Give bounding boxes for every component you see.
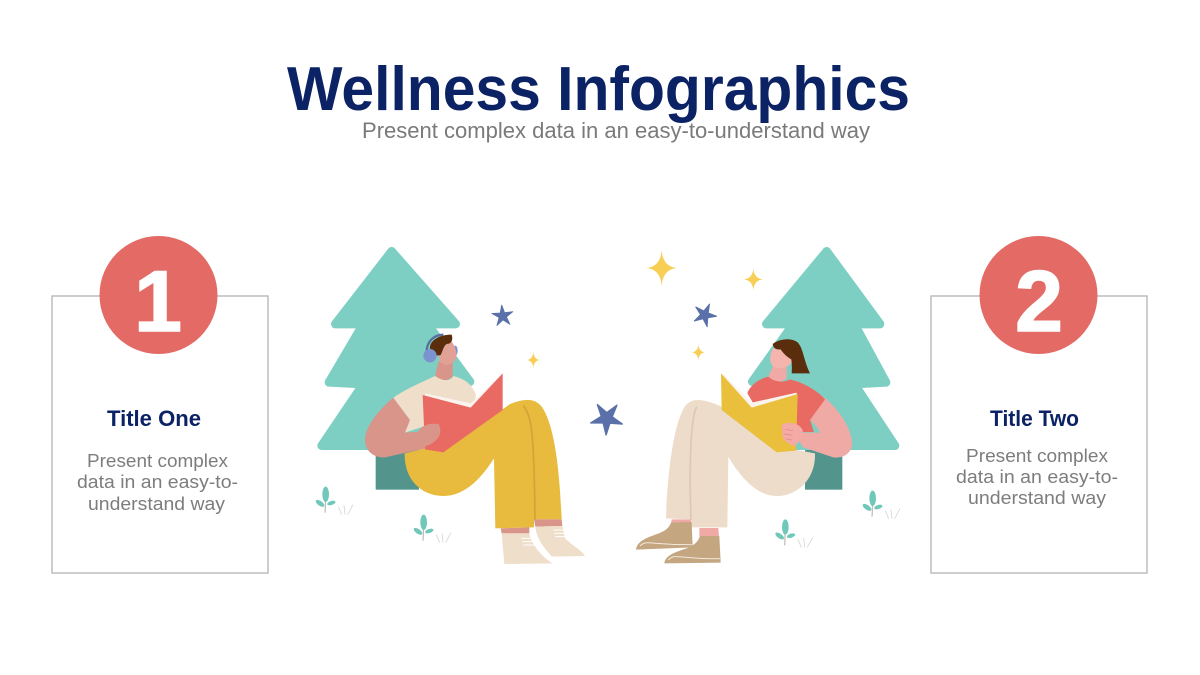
pants (666, 400, 815, 527)
shirt (747, 377, 825, 432)
heading: title one: Title One (107, 406, 201, 431)
face (438, 342, 456, 365)
icon: blue star (491, 304, 514, 326)
icon: small sparkle top (744, 268, 763, 290)
book (423, 373, 503, 452)
icon: sprout four (862, 491, 900, 519)
heading: title two: Title Two (990, 406, 1079, 431)
figure: man (365, 335, 585, 564)
panel: title two (931, 236, 1147, 573)
icon: sprout two (413, 515, 451, 543)
icon: right tree (752, 251, 895, 490)
illustration: man reading under tree (315, 251, 585, 564)
icon: blue star upper (690, 299, 720, 329)
text block two: data in an easy-to- (956, 467, 1118, 487)
text block one (77, 451, 238, 514)
panel frame two (931, 296, 1147, 573)
panel frame one (52, 296, 268, 573)
icon: left tree (322, 251, 470, 490)
icon: sprout three (774, 519, 813, 547)
arm (793, 397, 852, 457)
icon: sparkle (527, 352, 540, 368)
icon: blue star centre (584, 396, 627, 438)
cuffs (671, 519, 719, 537)
figure: woman (636, 339, 852, 563)
hair (773, 339, 810, 373)
text block one: understand way (88, 494, 225, 514)
text block one: data in an easy-to- (77, 472, 238, 492)
title: Wellness Infographics (287, 55, 910, 124)
far ear cup (453, 346, 458, 356)
legs (405, 400, 562, 528)
text block two (956, 446, 1118, 508)
icon: small sparkle lower (692, 344, 705, 361)
neck (768, 364, 787, 382)
subtitle: Present complex data in an easy-to-understand way (362, 118, 870, 143)
text block one: Present complex (87, 451, 228, 471)
neck (435, 362, 453, 380)
headphones band (427, 335, 443, 352)
number badge one (100, 236, 218, 354)
headphones (423, 349, 437, 362)
shoes (535, 526, 585, 557)
icon: sprout one (315, 487, 353, 515)
text block two: understand way (968, 488, 1106, 508)
hand (410, 424, 440, 448)
number badge two: 2 (1015, 254, 1063, 350)
panel: title one (52, 236, 268, 573)
shoes (636, 522, 693, 550)
number badge one: 1 (134, 254, 182, 350)
number badge two (980, 236, 1098, 354)
face (770, 348, 792, 368)
book (721, 373, 798, 452)
hand (782, 423, 803, 446)
arm (365, 398, 425, 457)
shirt (393, 376, 476, 433)
icon: large sparkle (646, 250, 677, 286)
illustration: woman reading under tree (584, 250, 900, 563)
text block two: Present complex (966, 446, 1108, 466)
hair (430, 335, 452, 355)
cuffs (501, 519, 562, 533)
